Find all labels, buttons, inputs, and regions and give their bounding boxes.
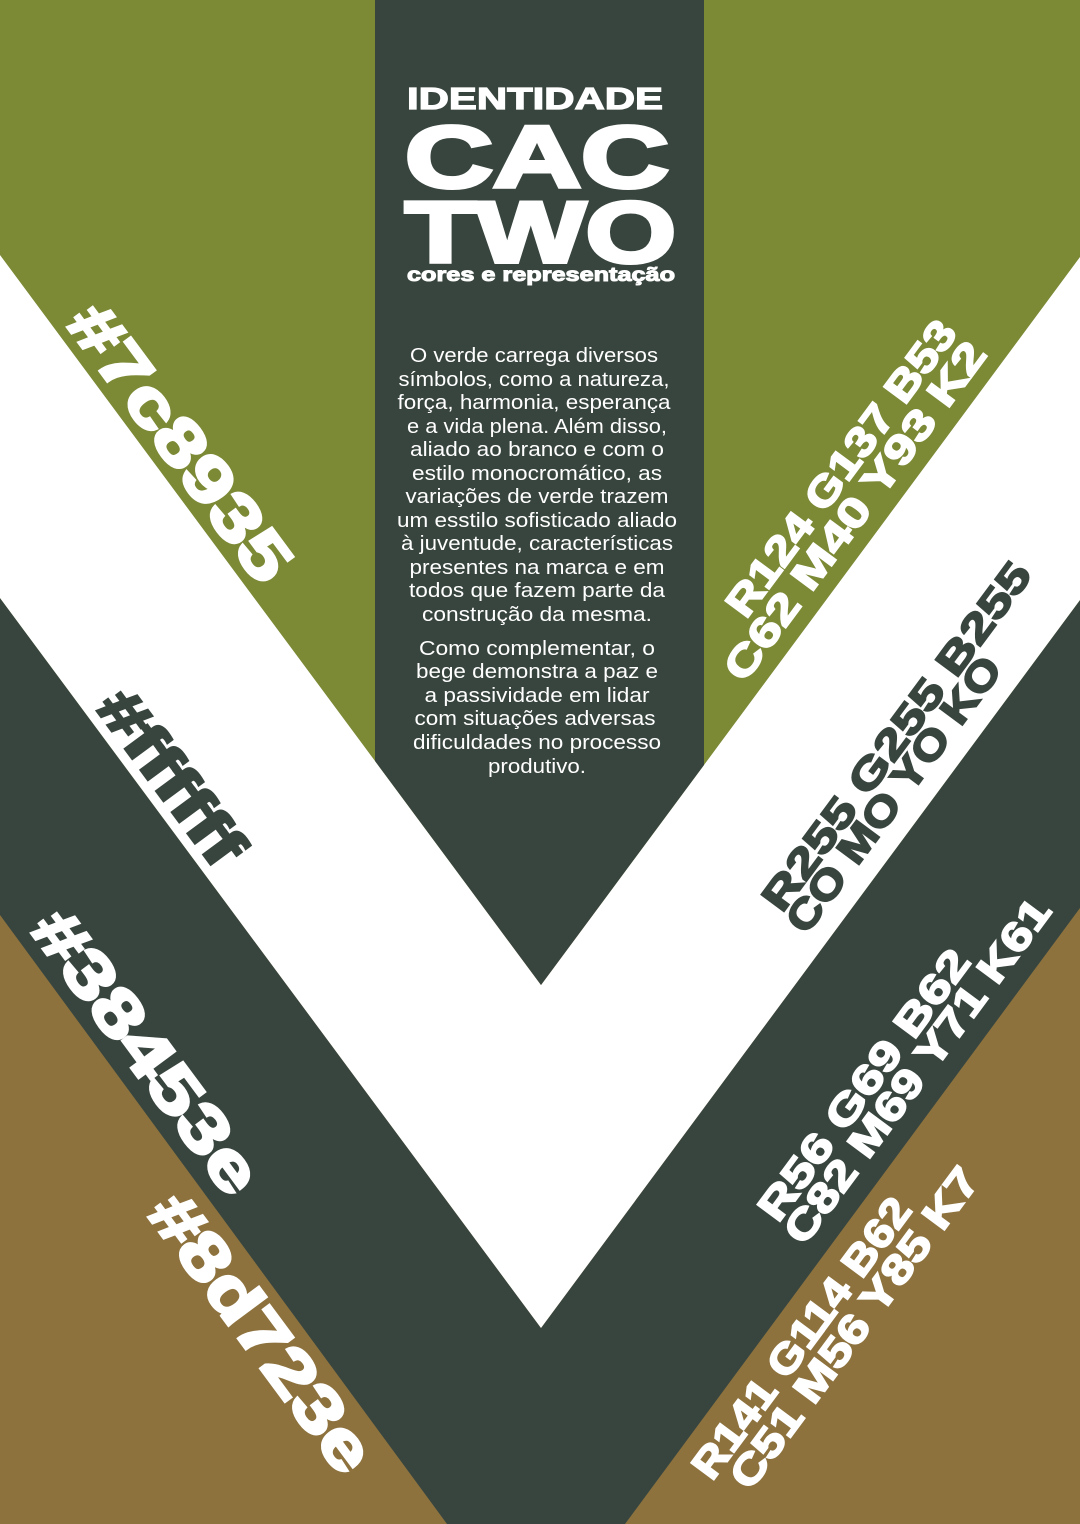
paragraph: beige meaning: produtivo. xyxy=(488,756,586,778)
color codes: dark: C82 M69 Y71 K61 xyxy=(774,889,1060,1252)
hex label: beige: #8d723e xyxy=(135,1179,389,1487)
body text xyxy=(397,345,677,778)
paragraph: beige meaning xyxy=(413,638,661,778)
paragraph: beige meaning: Como complementar, o xyxy=(419,638,655,660)
paragraph: green meaning: construção da mesma. xyxy=(422,604,652,626)
paragraph: green meaning: um esstilo sofisticado aliado xyxy=(397,510,677,532)
color codes: green: C62 M40 Y93 K2 xyxy=(714,333,995,689)
paragraph: beige meaning: a passividade em lidar xyxy=(424,685,650,707)
color codes: white xyxy=(752,553,1041,941)
band: dark chevron xyxy=(0,598,1080,1524)
color codes: white: CO MO YO KO xyxy=(776,647,1011,941)
panel: central dark column xyxy=(375,0,704,985)
color codes: green: R124 G137 B53 xyxy=(716,311,966,625)
title: cac: CAC xyxy=(405,109,669,206)
paragraph: green meaning: variações de verde trazem xyxy=(406,486,668,508)
paragraph: green meaning: à juventude, características xyxy=(401,533,673,555)
title: identidade: IDENTIDADE xyxy=(407,81,663,116)
hex label: white: #ffffff xyxy=(85,676,259,879)
color codes: green xyxy=(714,311,995,689)
paragraph: green meaning xyxy=(397,345,677,626)
color codes: dark xyxy=(748,889,1060,1252)
paragraph: green meaning: símbolos, como a natureza, xyxy=(398,369,670,391)
color codes: beige xyxy=(682,1158,988,1497)
subtitle: cores e representação xyxy=(407,265,675,286)
band: beige bottom xyxy=(0,905,1080,1524)
paragraph: beige meaning: bege demonstra a paz e xyxy=(416,661,658,683)
paragraph: green meaning: todos que fazem parte da xyxy=(409,580,666,602)
paragraph: green meaning: estilo monocromático, as xyxy=(412,463,662,485)
band: white chevron xyxy=(0,255,1080,1328)
paragraph: beige meaning: dificuldades no processo xyxy=(413,732,661,754)
paragraph: green meaning: força, harmonia, esperança xyxy=(398,392,671,414)
title: two: TWO xyxy=(405,185,676,281)
hex label: dark: #38453e xyxy=(18,895,276,1208)
color codes: beige: R141 G114 B62 xyxy=(682,1188,921,1487)
paragraph: green meaning: presentes na marca e em xyxy=(410,557,664,579)
color codes: beige: C51 M56 Y85 K7 xyxy=(720,1158,988,1497)
title block xyxy=(405,81,676,286)
paragraph: green meaning: aliado ao branco e com o xyxy=(410,439,664,461)
color codes: dark: R56 G69 B62 xyxy=(748,940,979,1229)
paragraph: green meaning: O verde carrega diversos xyxy=(410,345,658,367)
paragraph: green meaning: e a vida plena. Além disso, xyxy=(407,416,667,438)
paragraph: beige meaning: com situações adversas xyxy=(414,708,656,730)
hex label: green: #7c8935 xyxy=(54,289,308,596)
color codes: white: R255 G255 B255 xyxy=(752,553,1041,919)
